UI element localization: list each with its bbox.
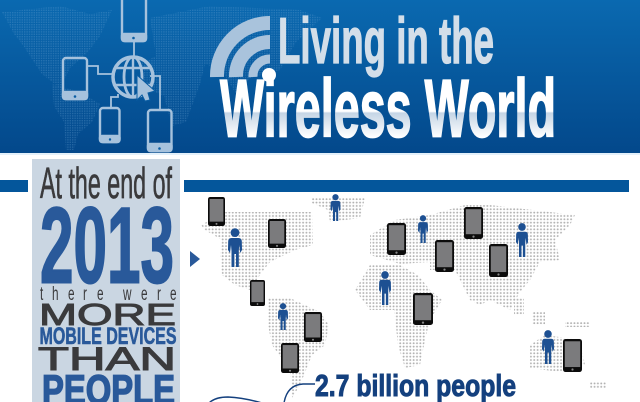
icon: phone North America 1 bbox=[208, 197, 225, 226]
icon: wifi signal bbox=[217, 23, 276, 82]
map: people bbox=[228, 194, 554, 364]
icon: top phone bbox=[122, 0, 146, 41]
panel: statistic column bbox=[32, 159, 180, 402]
icon: phone Russia bbox=[464, 207, 483, 239]
map: devices bbox=[208, 197, 582, 373]
icon: phone Africa bbox=[413, 293, 433, 325]
icon: phone South America 2 bbox=[281, 343, 299, 373]
connector lines bbox=[88, 42, 160, 110]
text: than: THAN bbox=[38, 341, 176, 377]
callout: 2.7 billion people: 2.7 billion people bbox=[315, 368, 516, 402]
arrow bbox=[190, 251, 200, 267]
text: mobile devices: MOBILE DEVICES bbox=[40, 323, 176, 350]
section bar right bbox=[184, 180, 629, 192]
icon: person Europe bbox=[418, 215, 428, 243]
year 2013: 2013 bbox=[40, 184, 174, 306]
dotted world map bbox=[201, 198, 606, 398]
icon: phone North America 2 bbox=[268, 219, 286, 248]
icon: left phone bbox=[63, 58, 87, 99]
text: there were: there were bbox=[40, 284, 177, 305]
section bar left bbox=[0, 180, 28, 192]
callout: 2.7 billion people bbox=[209, 368, 516, 402]
icon: person West Africa bbox=[379, 271, 391, 305]
icon: phone Australia bbox=[563, 339, 582, 372]
icon: cursor bbox=[137, 75, 155, 101]
icon: phone South America 1 bbox=[304, 312, 322, 342]
icon: bottom right phone bbox=[148, 110, 172, 151]
heading: at the end of: At the end of bbox=[40, 159, 172, 208]
icon: person Greenland bbox=[330, 194, 340, 221]
header dotted world map bbox=[2, 6, 322, 150]
text: more: MORE bbox=[39, 297, 176, 332]
header banner bbox=[0, 0, 640, 155]
icon: globe bbox=[113, 57, 153, 97]
icon: person South America bbox=[278, 303, 288, 330]
icon: phone Europe bbox=[387, 223, 406, 255]
callout lead lines bbox=[209, 384, 315, 402]
icon: phone China bbox=[489, 244, 508, 277]
icon: person Asia bbox=[516, 223, 528, 257]
icon: bottom middle phone bbox=[100, 108, 120, 142]
icon: phone Middle East bbox=[435, 240, 454, 272]
icon: phone Central America bbox=[250, 280, 265, 306]
icon: connected devices around globe bbox=[63, 0, 172, 151]
icon: person Oceania bbox=[542, 330, 554, 364]
icon: person North America bbox=[228, 228, 242, 267]
